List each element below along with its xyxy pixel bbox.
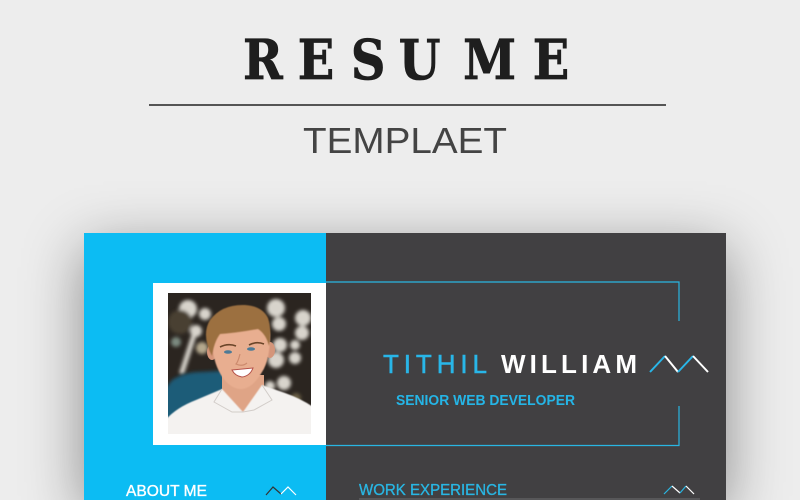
name	[383, 349, 637, 379]
neck	[222, 375, 264, 414]
last name: WILLIAM	[501, 349, 637, 379]
header frame	[326, 282, 679, 446]
mouth	[232, 368, 253, 377]
first name: TITHIL	[383, 349, 487, 379]
face	[213, 328, 271, 388]
subtitle: TEMPLAET	[303, 120, 507, 161]
panel: blue sidebar	[84, 233, 326, 500]
job title: SENIOR WEB DEVELOPER	[396, 393, 575, 409]
hair	[206, 305, 270, 356]
background spools	[168, 299, 311, 403]
icon: zigzag peaks	[650, 356, 708, 372]
ears	[207, 346, 215, 360]
heading: about me: ABOUT ME	[126, 483, 207, 500]
icon: zigzag peaks, about me	[266, 487, 296, 495]
blue jacket	[168, 369, 222, 418]
panel: resume card	[84, 233, 726, 500]
panel: dark main area	[326, 233, 726, 500]
shirt	[168, 384, 311, 434]
eyes and brows	[220, 343, 264, 347]
title: RESUME	[243, 29, 569, 93]
heading: work experience: WORK EXPERIENCE	[359, 482, 507, 499]
nose shadow	[236, 354, 247, 365]
card shadow	[84, 233, 726, 500]
photo: smiling young man	[168, 293, 311, 434]
divider	[149, 104, 666, 106]
section rule	[359, 498, 700, 500]
photo frame	[153, 283, 326, 445]
icon: zigzag peaks, work experience	[664, 486, 694, 494]
